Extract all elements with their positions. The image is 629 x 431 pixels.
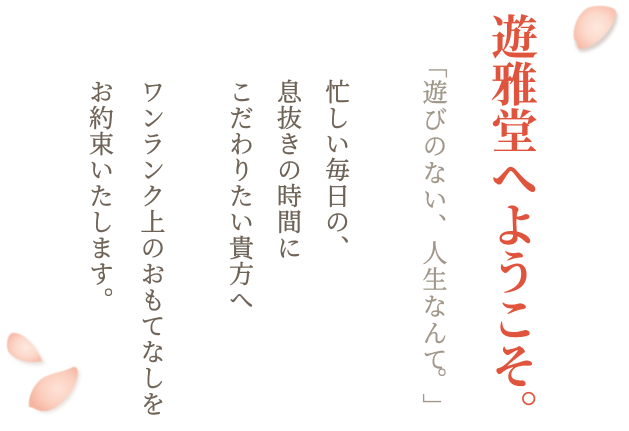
text line 5: お約束いたします。 xyxy=(86,78,112,312)
icon: petal bottom left large xyxy=(29,367,80,413)
icon: petal top right xyxy=(574,6,618,52)
icon: petal bottom left small xyxy=(7,333,45,365)
text line 2: 息抜きの時間に xyxy=(274,78,300,260)
text line 4: ワンランク上のおもてなしを xyxy=(137,78,164,416)
quote: 「遊びのない、人生なんて。」 xyxy=(419,53,446,421)
text line 1: 忙しい毎日の、 xyxy=(322,78,348,260)
title: 遊雅堂へようこそ。 xyxy=(484,13,536,431)
text line 3: こだわりたい貴方へ xyxy=(226,78,252,312)
